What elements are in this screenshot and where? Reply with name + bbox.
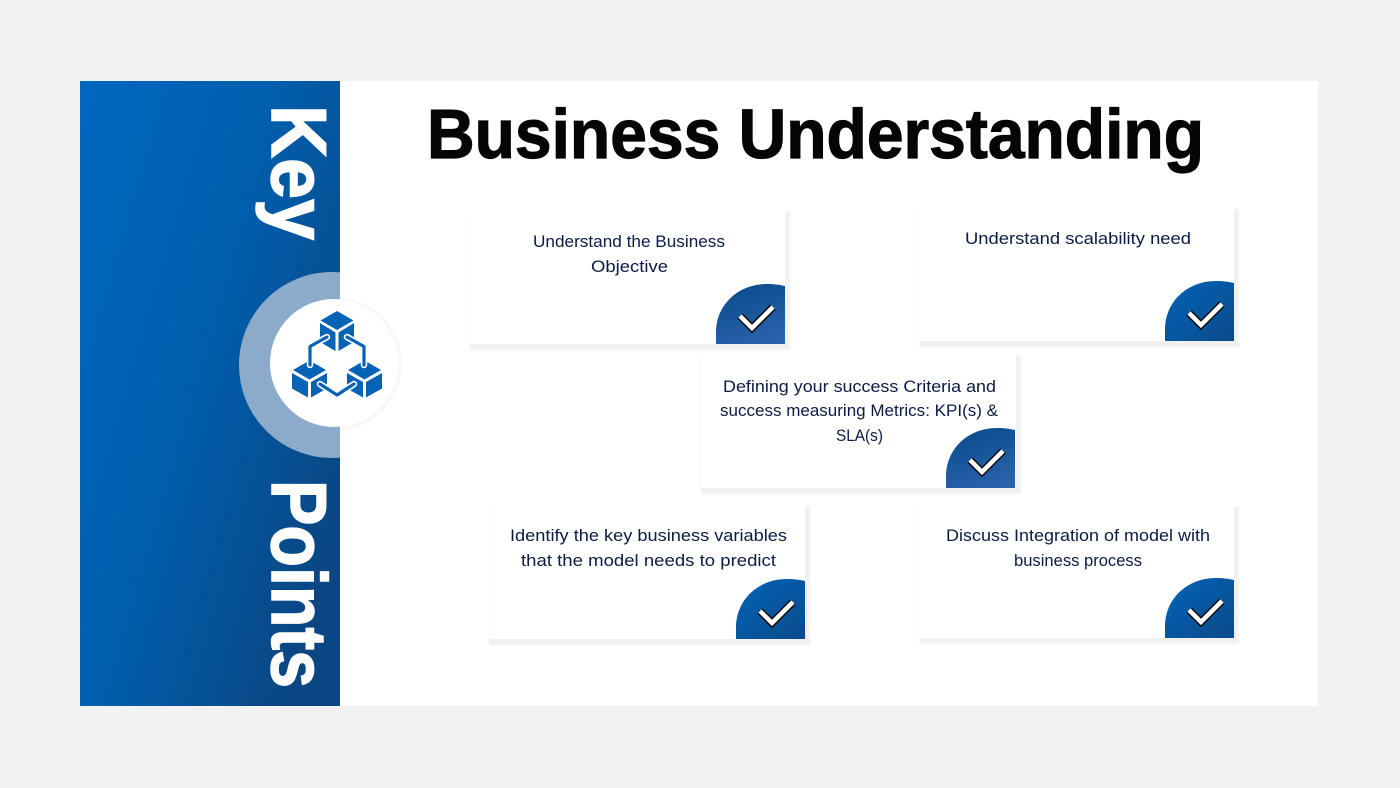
card text [946, 526, 1210, 570]
check badge [946, 428, 1015, 488]
badge disc [270, 299, 398, 427]
white content panel [340, 81, 1318, 706]
card text [720, 377, 999, 445]
icon badge: connected cubes [239, 272, 382, 458]
card text: that the model needs to predict [521, 551, 776, 570]
check badge [716, 284, 785, 344]
card text [533, 232, 725, 276]
check badge [1165, 281, 1234, 341]
icon: cube network [292, 311, 382, 398]
card text: success measuring Metrics: KPI(s) & [720, 401, 999, 420]
card: understand the business objective [470, 209, 790, 350]
card text: Objective [591, 257, 668, 276]
label: Key: Key [255, 105, 343, 240]
badge shadow [268, 297, 402, 431]
panel: key points sidebar [80, 81, 343, 706]
card text: SLA(s) [836, 426, 883, 445]
check badge [1165, 578, 1234, 638]
title: Business Understanding [427, 95, 1204, 173]
sidebar gradient [80, 81, 340, 706]
connector links [310, 337, 364, 395]
card: identify key business variables [489, 503, 810, 645]
card text: Defining your success Criteria and [723, 377, 996, 396]
card text: Understand the Business [533, 232, 725, 251]
infographic slide [80, 81, 1318, 706]
card: success criteria and metrics [701, 353, 1021, 494]
check badge [736, 579, 805, 639]
cube: left [292, 360, 327, 398]
card text: Discuss Integration of model with [946, 526, 1210, 545]
card text [510, 526, 787, 570]
card text: Understand scalability need [965, 229, 1191, 248]
card text: Identify the key business variables [510, 526, 787, 545]
cube: top [320, 311, 354, 351]
label: Points: Points [255, 480, 343, 688]
badge ring [239, 272, 340, 458]
card: discuss integration [920, 503, 1239, 644]
card text: business process [1014, 551, 1142, 570]
cube: right [347, 360, 382, 398]
card: understand scalability need [920, 206, 1239, 347]
